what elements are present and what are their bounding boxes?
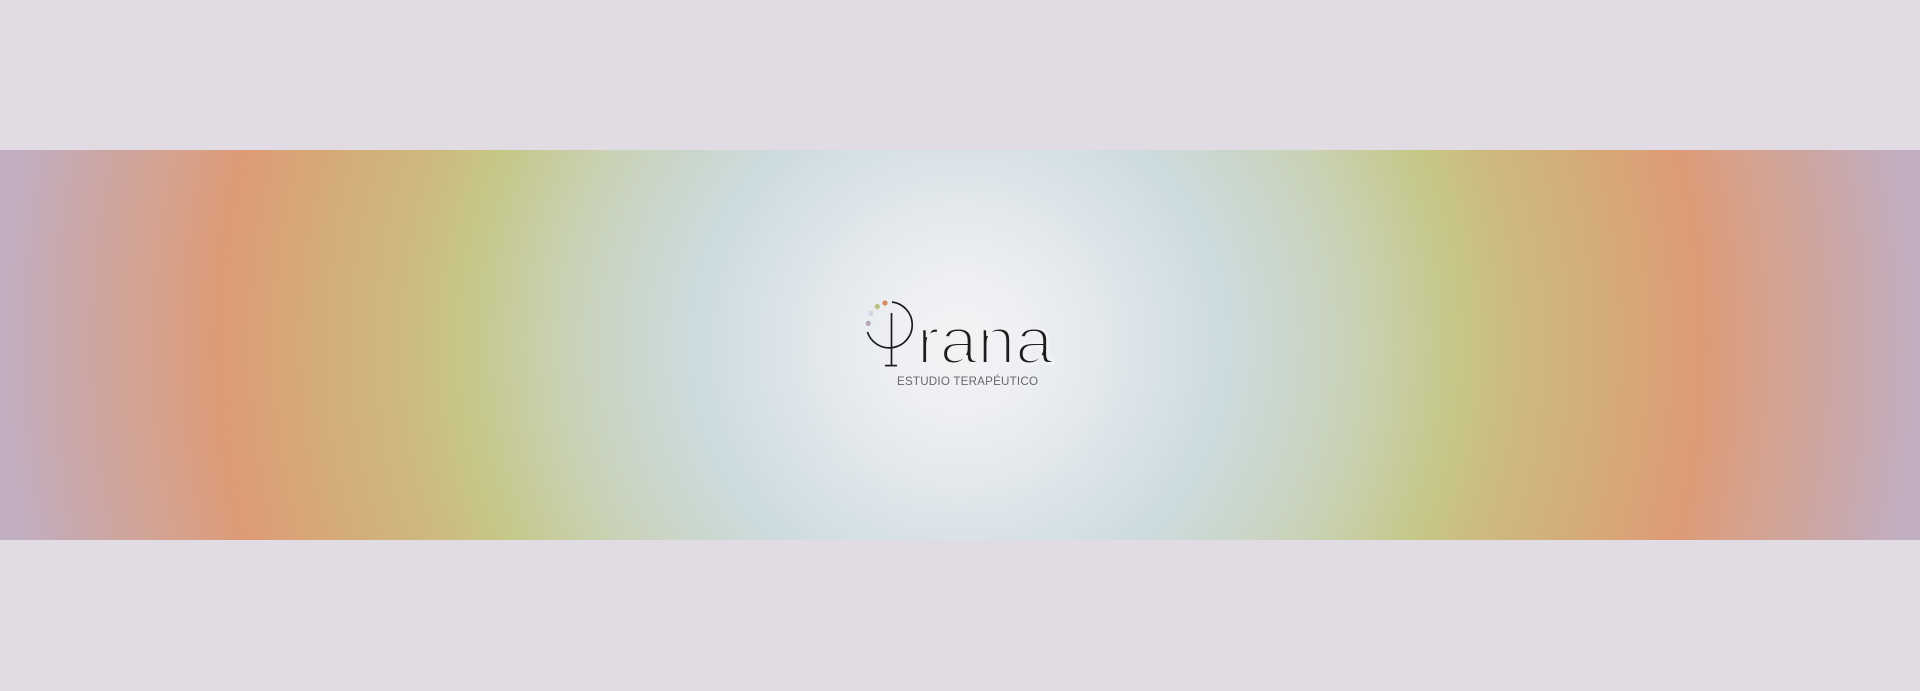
wordmark: rana: rana: [917, 304, 1053, 378]
gradient band: [0, 150, 1920, 540]
tagline: ESTUDIO TERAPÉUTICO: [897, 375, 1038, 388]
icon: logo P mark: [867, 302, 912, 366]
icon: four coloured dots: [866, 300, 888, 326]
